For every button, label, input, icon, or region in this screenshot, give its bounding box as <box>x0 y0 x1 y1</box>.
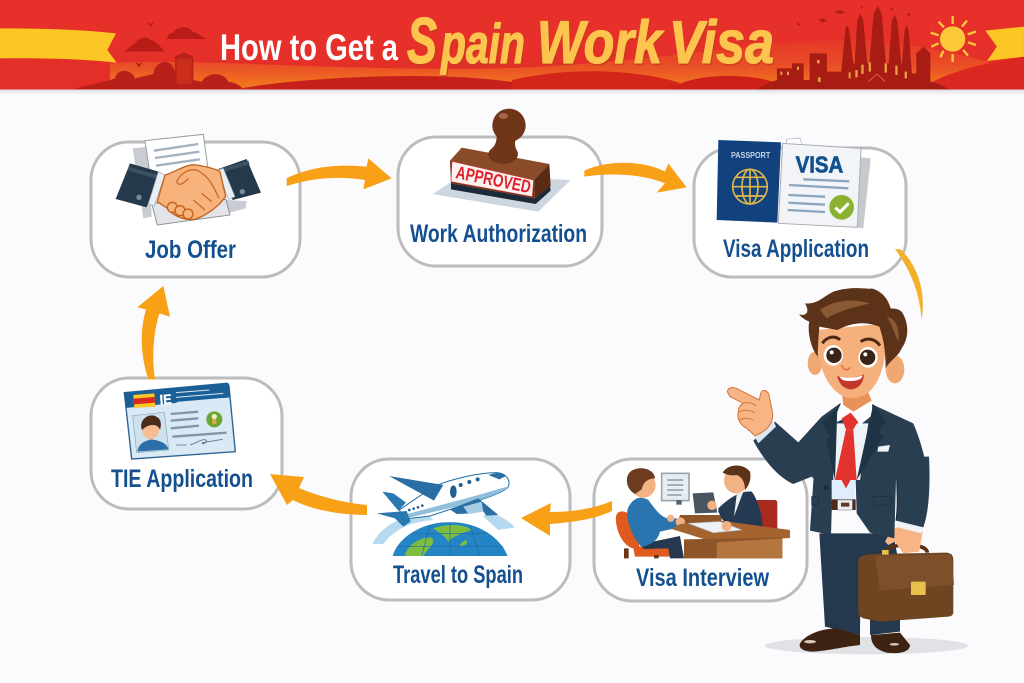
character lower body <box>765 457 968 654</box>
arrow: Travel to Spain to TIE Application <box>270 474 367 515</box>
header banner <box>0 0 1024 90</box>
hand pointing <box>727 388 773 436</box>
label: Visa Application: Visa Application <box>723 235 869 263</box>
panel: Visa Application <box>694 138 906 277</box>
arrow: Visa Application to character <box>895 249 923 320</box>
label: Work Authorization: Work Authorization <box>410 220 587 248</box>
briefcase <box>858 545 954 622</box>
icon: airplane over globe <box>372 473 515 556</box>
title: Visa <box>670 10 775 78</box>
head <box>799 288 907 398</box>
title: pain <box>441 14 526 77</box>
icon: passport and visa document: VISA <box>796 152 843 178</box>
title: pain <box>440 12 525 75</box>
banner left scenery <box>0 21 243 89</box>
icon: sun <box>931 16 976 62</box>
icon: TIE card: IE <box>159 391 172 408</box>
arrow: TIE Application to Job Offer <box>137 286 170 379</box>
label: Travel to Spain: Travel to Spain <box>393 561 523 589</box>
panel: Travel to Spain <box>351 459 570 600</box>
label: Visa Interview: Visa Interview <box>636 564 769 592</box>
title: Work <box>538 10 665 78</box>
arrow: Work Authorization to Visa Application <box>584 163 687 193</box>
arrow: Job Offer to Work Authorization <box>287 158 392 189</box>
panel: Job Offer <box>91 134 300 277</box>
banner hills <box>110 40 1024 90</box>
icon: approved stamp: APPROVED <box>454 162 533 197</box>
icon: passport and visa document: PASSPORT <box>731 151 770 160</box>
title: Work <box>537 9 664 76</box>
label: TIE Application: TIE Application <box>111 465 253 493</box>
title: S <box>407 4 437 77</box>
label: Job Offer: Job Offer <box>145 236 236 264</box>
title: How to Get a <box>220 27 398 68</box>
panel: TIE Application <box>91 378 282 509</box>
arrow: Visa Interview to Travel to Spain <box>521 501 612 536</box>
title: Visa <box>669 9 774 76</box>
character: businessman with briefcase <box>727 288 968 654</box>
panel: Visa Interview <box>594 459 807 601</box>
title <box>220 4 775 79</box>
banner right scenery <box>757 6 1024 89</box>
title: S <box>408 6 438 79</box>
panel: Work Authorization <box>398 109 602 266</box>
icon: interview at desk <box>616 466 790 558</box>
icon: TIE card <box>124 383 235 459</box>
icon: passport and visa document <box>717 138 871 228</box>
character upper body <box>727 288 928 484</box>
icon: handshake with contract <box>116 134 261 225</box>
icon: approved stamp <box>433 109 571 212</box>
